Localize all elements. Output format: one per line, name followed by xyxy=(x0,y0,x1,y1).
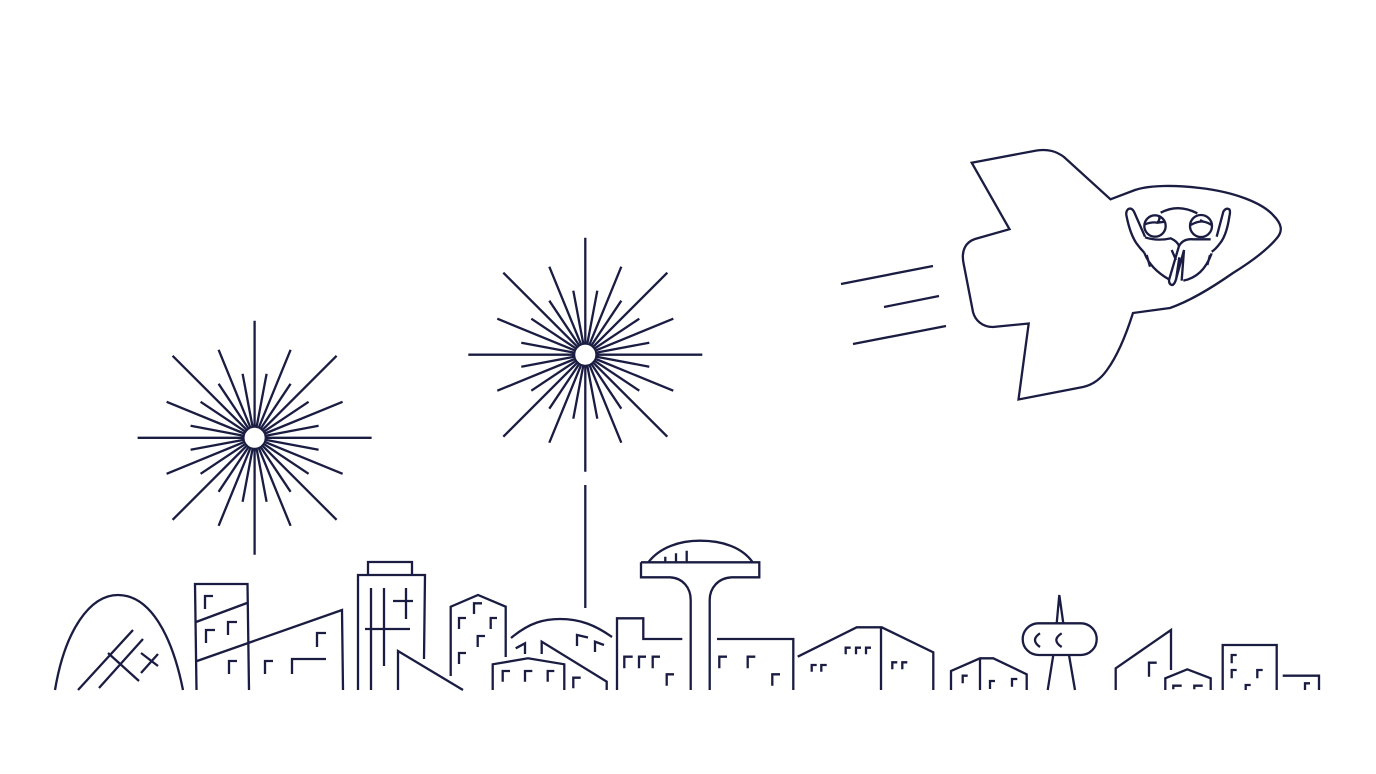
skyline: water tower xyxy=(641,541,759,690)
skyline: small house xyxy=(951,658,1027,690)
skyline: square block xyxy=(1223,645,1277,690)
skyline: angled block xyxy=(195,584,343,690)
firework launch trail xyxy=(584,485,586,608)
skyline: right of water tower block xyxy=(717,639,793,690)
skyline: dome and low houses xyxy=(493,619,612,690)
skyline: wedge building and small house xyxy=(1116,630,1211,690)
skyline: pitched block xyxy=(451,595,506,676)
firework: centre burst xyxy=(468,238,702,472)
skyline: stepped block xyxy=(617,618,682,690)
skyline: low end block xyxy=(1283,676,1319,690)
skyline: wide sloped block xyxy=(798,627,933,690)
passengers' bodies and seat xyxy=(1144,208,1212,285)
skyline: gherkin tower xyxy=(55,595,183,690)
rocket body xyxy=(963,150,1281,400)
skyline: tall tower xyxy=(358,562,463,690)
passengers' heads xyxy=(1144,215,1212,237)
rocket speed lines xyxy=(841,266,946,344)
rocket passengers xyxy=(1126,208,1230,285)
firework: left burst xyxy=(138,321,372,555)
left passenger arm xyxy=(1126,209,1145,253)
right passenger arm xyxy=(1212,209,1230,252)
skyline: observation tower xyxy=(1023,595,1097,690)
